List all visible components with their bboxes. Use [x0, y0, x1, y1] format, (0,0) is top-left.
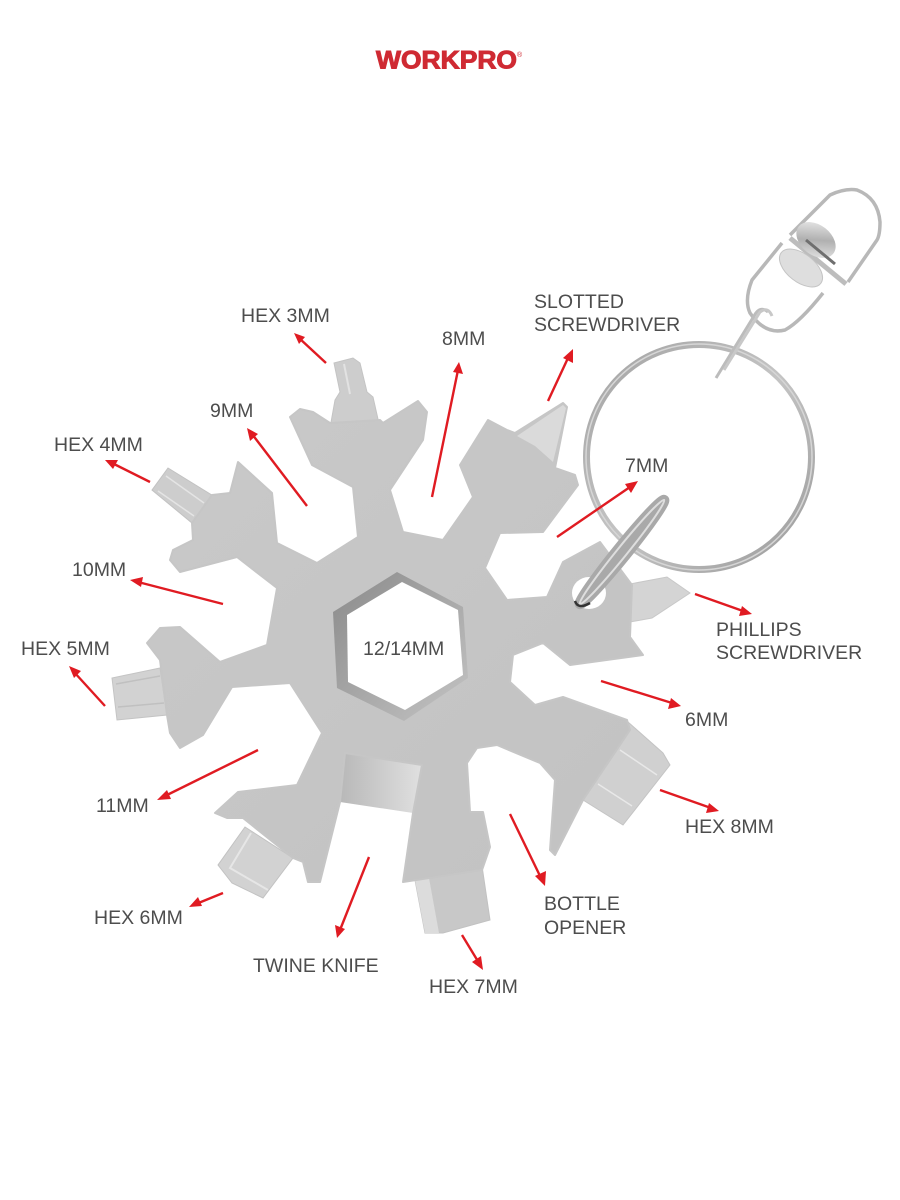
hex bit 4mm [152, 468, 215, 523]
label: slotted screwdriver: SLOTTED [534, 291, 624, 313]
slotted screwdriver tip highlight [517, 405, 566, 462]
split ring [575, 497, 668, 607]
snowflake body [147, 401, 643, 882]
arrow: 6mm [601, 681, 681, 709]
swivel clasp [716, 190, 880, 378]
hex bit 3mm [330, 358, 380, 428]
label: 12/14mm: 12/14MM [363, 638, 444, 660]
label: phillips screwdriver: SCREWDRIVER [716, 642, 862, 664]
key ring and swivel clasp [586, 190, 880, 570]
phillips screwdriver tip [630, 577, 690, 622]
label: hex 4mm: HEX 4MM [54, 434, 143, 456]
label: 9mm: 9MM [210, 400, 253, 422]
arrow: 10mm [130, 577, 223, 604]
label: 10mm: 10MM [72, 559, 126, 581]
arrow: hex 6mm [189, 893, 223, 907]
arrow: hex 3mm [294, 333, 326, 363]
label: hex 5mm: HEX 5MM [21, 638, 110, 660]
label: 11mm: 11MM [96, 795, 149, 817]
arrow: hex 8mm [660, 790, 719, 813]
label: twine knife: TWINE KNIFE [253, 955, 379, 977]
central hexagon opening [347, 582, 463, 710]
label: hex 8mm: HEX 8MM [685, 816, 774, 838]
label: hex 6mm: HEX 6MM [94, 907, 183, 929]
logo: WORKPRO: ® [517, 51, 523, 59]
hex bit 6mm [218, 827, 293, 898]
arrow: phillips screwdriver [695, 594, 752, 616]
arrow: 11mm [157, 750, 258, 800]
label: bottle opener: BOTTLE [544, 893, 620, 915]
label: 8mm: 8MM [442, 328, 485, 350]
arrow: 8mm [432, 362, 463, 497]
hex bit 8mm [583, 722, 670, 825]
twine knife square [340, 753, 422, 813]
label: hex 7mm: HEX 7MM [429, 976, 518, 998]
snowflake multi-tool [112, 358, 690, 933]
arrow: bottle opener [510, 814, 546, 886]
label: 6mm: 6MM [685, 709, 728, 731]
arrow: 7mm [557, 481, 638, 537]
hex bit 5mm [112, 668, 167, 720]
central hexagon wall [333, 572, 468, 721]
arrow: hex 4mm [105, 460, 150, 482]
key ring hole [572, 577, 606, 609]
large key ring [586, 344, 812, 570]
arrow: slotted screwdriver [548, 349, 573, 401]
hex bit 7mm [415, 866, 490, 933]
arrow: 9mm [247, 428, 307, 506]
label: 7mm: 7MM [625, 455, 668, 477]
label: bottle opener: OPENER [544, 917, 626, 939]
logo: WORKPRO: WORKPRO [376, 46, 517, 74]
label: hex 3mm: HEX 3MM [241, 305, 330, 327]
label: phillips screwdriver: PHILLIPS [716, 619, 802, 641]
label: slotted screwdriver: SCREWDRIVER [534, 314, 680, 336]
arrow: hex 7mm [462, 935, 483, 970]
arrow: hex 5mm [69, 666, 105, 706]
arrow: twine knife [335, 857, 369, 938]
